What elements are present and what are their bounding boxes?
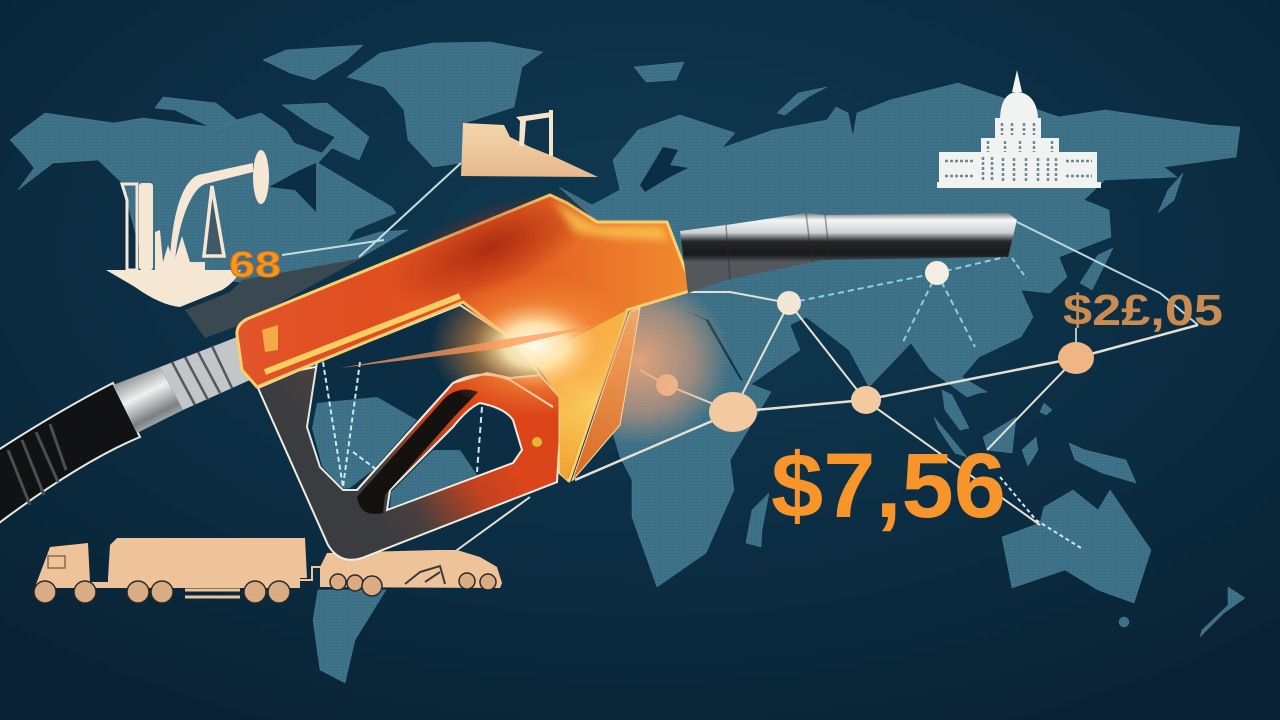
nozzle: hose ribs bbox=[8, 424, 66, 505]
nozzle: main orange body bbox=[237, 195, 693, 481]
map: New Zealand bbox=[1200, 587, 1245, 637]
nozzle: corrugated ferrule bbox=[160, 337, 250, 410]
network nodes bbox=[656, 261, 1094, 432]
map: Svalbard bbox=[634, 62, 684, 82]
node: central Asia bbox=[925, 261, 949, 285]
cab window bbox=[48, 556, 65, 568]
pump jack arm bbox=[170, 163, 253, 262]
map: South America bbox=[313, 590, 386, 683]
map: Borneo bbox=[983, 417, 1016, 453]
nozzle: trigger screw bbox=[532, 437, 542, 447]
under-tank rails bbox=[185, 583, 240, 597]
capitol drum bbox=[995, 118, 1041, 140]
map: Sulawesi bbox=[1040, 403, 1052, 415]
nozzle: metal spout bbox=[680, 213, 1017, 293]
map: Philippine islands bbox=[1022, 437, 1038, 466]
main price figure: $7,56 bbox=[771, 435, 1006, 537]
network of connector lines bbox=[282, 163, 1198, 553]
map: Japan bbox=[1080, 248, 1113, 290]
map: Eurasia bbox=[559, 83, 1240, 397]
low refinery skyline bbox=[155, 230, 205, 270]
nozzle: land seen through guard bbox=[312, 397, 417, 489]
rig ground bbox=[461, 123, 598, 177]
node: east Asia bbox=[1058, 342, 1094, 374]
nozzle: top right yellow band bbox=[553, 200, 668, 240]
truck coupling bbox=[297, 567, 322, 580]
nozzle: deep red shading bbox=[372, 168, 608, 328]
tanker trailer bbox=[108, 538, 307, 578]
nozzle: side blade bbox=[572, 308, 640, 481]
icon: oil refinery and pump jack bbox=[106, 150, 269, 307]
small price label left: 68 bbox=[229, 244, 281, 285]
map: Novaya Zemlya bbox=[777, 87, 827, 115]
node: small Africa bbox=[656, 374, 678, 396]
capitol lantern bbox=[1012, 70, 1022, 92]
pump jack derrick bbox=[204, 186, 224, 256]
nozzle: yellow lower edge bbox=[265, 296, 460, 372]
nozzle: hose bbox=[0, 383, 140, 526]
nozzle: left highlight bbox=[262, 325, 278, 352]
nozzle: dark handle guard bbox=[258, 330, 562, 560]
map: Madagascar bbox=[746, 493, 769, 547]
nozzle: spout ribs bbox=[726, 213, 830, 280]
dark grey backing shape under refinery bbox=[185, 258, 362, 338]
map: Arctic island bbox=[263, 45, 363, 80]
map: Arctic archipelago bbox=[155, 97, 237, 130]
rig pump jack bbox=[516, 110, 553, 156]
price label top right: $2£,05 bbox=[1063, 286, 1223, 335]
map: Sakhalin bbox=[1158, 173, 1183, 213]
truck wheels bbox=[34, 581, 290, 603]
nozzle: lever outline bbox=[357, 375, 553, 490]
map: Sumatra bbox=[934, 417, 967, 457]
nozzle: ferrule ribs bbox=[172, 346, 232, 405]
icon: capitol building bbox=[937, 70, 1101, 188]
nozzle: dashed lines in guard bbox=[323, 362, 377, 487]
pump jack head bbox=[253, 150, 269, 204]
truck cab bbox=[35, 543, 300, 588]
second truck body bbox=[320, 550, 502, 588]
refinery column bbox=[139, 183, 153, 270]
nozzle: hose collar bbox=[113, 367, 183, 433]
node: large east Africa bbox=[709, 392, 757, 432]
nozzle: translucent wash beside blade bbox=[550, 275, 730, 445]
map: Tasmania bbox=[1119, 617, 1129, 627]
node: Arabia bbox=[777, 291, 801, 315]
icon: oil rig on land bbox=[461, 110, 598, 177]
map: New Guinea bbox=[1069, 443, 1136, 483]
second truck mechanical details bbox=[405, 566, 445, 584]
map: Malay strip bbox=[942, 390, 969, 430]
capitol base bbox=[937, 182, 1101, 188]
map: Australia bbox=[1002, 490, 1151, 603]
nozzle: glow bbox=[430, 273, 640, 417]
nozzle: trigger opening bbox=[387, 403, 522, 510]
second truck wheels bbox=[330, 573, 496, 596]
fuel nozzle bbox=[0, 168, 1017, 560]
map: Africa bbox=[612, 300, 771, 587]
refinery base bbox=[106, 270, 241, 307]
nozzle: black trigger lever bbox=[357, 390, 478, 514]
nozzle: land in trigger opening bbox=[390, 450, 477, 508]
lattice tower bbox=[122, 184, 137, 270]
nozzle: red light streak bbox=[340, 325, 600, 368]
nozzle: blade yellow bbox=[540, 310, 627, 480]
map: Greenland bbox=[347, 42, 543, 167]
capitol windows bbox=[945, 123, 1092, 182]
map: Hudson Bay bbox=[269, 163, 316, 212]
map: North America bbox=[10, 103, 408, 282]
map: Baltic Sea bbox=[640, 147, 688, 192]
capitol central block bbox=[981, 138, 1059, 156]
nozzle: dashed line in trigger opening bbox=[477, 407, 482, 472]
icon: tanker truck bbox=[34, 538, 502, 603]
capitol wings bbox=[939, 152, 1097, 182]
capitol dome bbox=[1000, 92, 1038, 120]
nozzle: window in guard bbox=[307, 305, 540, 490]
node: Indian Ocean bbox=[851, 386, 881, 414]
